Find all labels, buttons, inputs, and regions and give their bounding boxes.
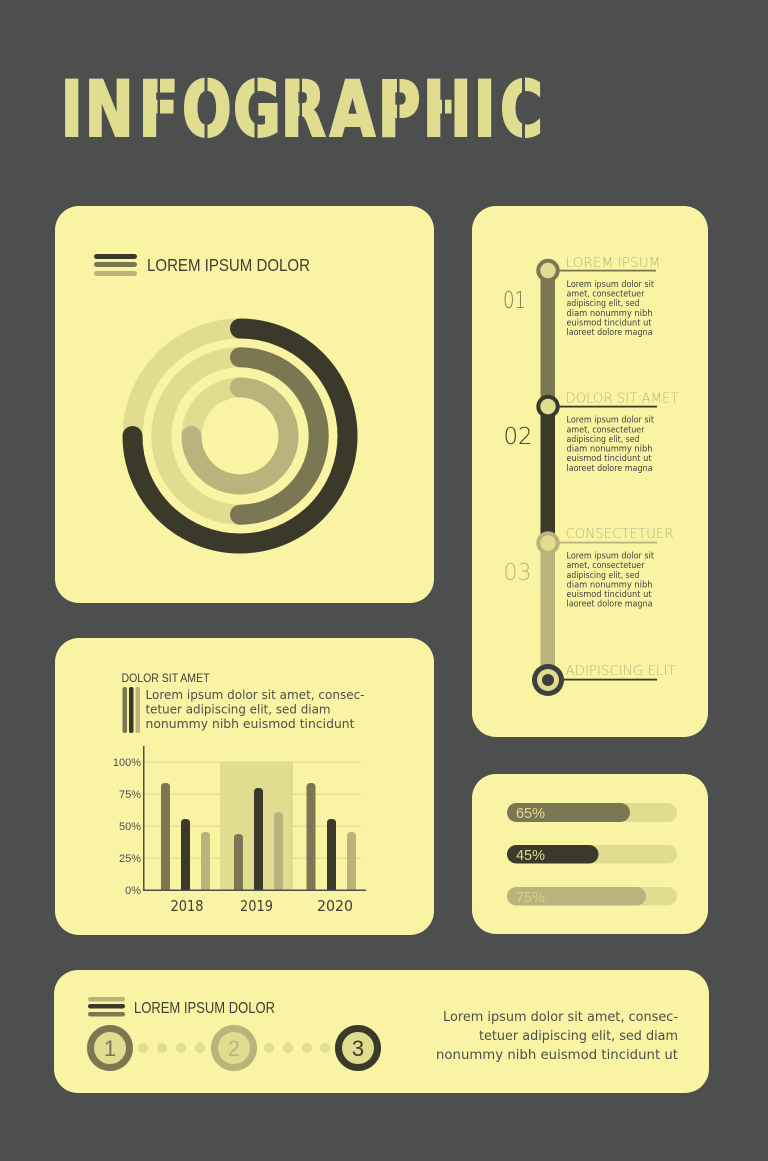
step end: ADIPISCING ELIT	[566, 663, 676, 679]
panel: timeline	[472, 206, 708, 737]
step 02: Lorem ipsum dolor sit	[566, 416, 655, 426]
progress 45%	[507, 845, 677, 864]
icon: list bars	[88, 997, 125, 1016]
step circle 1	[90, 1028, 130, 1068]
step 03: diam nonummy nibh	[566, 580, 652, 590]
chart description	[146, 687, 364, 731]
bar chart: 2019	[240, 897, 273, 915]
connector dots	[138, 1043, 330, 1053]
step 01: LOREM IPSUM	[566, 255, 660, 271]
panel: progress bars	[472, 774, 708, 934]
icon: vertical bars	[122, 687, 140, 733]
step 03: amet, consectetuer	[566, 561, 645, 571]
step 01: 01	[503, 288, 526, 314]
progress 75%	[507, 887, 677, 906]
timeline track	[540, 270, 555, 680]
chart description: nonummy nibh euismod tincidunt	[146, 716, 355, 731]
step 01	[503, 255, 660, 338]
chart description: tetuer adipiscing elit, sed diam	[146, 702, 330, 716]
step 02: laoreet dolore magna	[566, 464, 652, 474]
step 03	[504, 526, 674, 610]
step 03: Lorem ipsum dolor sit	[566, 552, 655, 562]
chart description: Lorem ipsum dolor sit amet, consec-	[146, 687, 364, 702]
progress 65%	[507, 803, 677, 822]
icon: list bars	[94, 254, 137, 276]
step circle 3	[338, 1028, 378, 1068]
steps description: nonummy nibh euismod tincidunt ut	[436, 1047, 678, 1063]
step 02: DOLOR SIT AMET	[566, 390, 679, 406]
step end	[532, 663, 676, 696]
chart heading: DOLOR SIT AMET	[122, 671, 210, 685]
bar chart: 100%	[113, 757, 141, 769]
donut rings	[132, 328, 348, 544]
panel: bar chart	[55, 638, 434, 935]
step 03: laoreet dolore magna	[566, 600, 652, 610]
bar chart: 50%	[119, 821, 141, 833]
step 01: Lorem ipsum dolor sit	[566, 280, 655, 290]
title: INFOGRAPHIC	[61, 65, 543, 154]
step 01: diam nonummy nibh	[566, 309, 652, 319]
step circle 2	[214, 1028, 254, 1068]
progress 65%: 65%	[516, 805, 545, 822]
step circle 1: 1	[104, 1036, 116, 1061]
step circle 3: 3	[352, 1036, 364, 1061]
step 02: 02	[504, 424, 532, 450]
step 03: euismod tincidunt ut	[566, 590, 652, 600]
heading: LOREM IPSUM DOLOR	[134, 1000, 275, 1017]
steps description: Lorem ipsum dolor sit amet, consec-	[443, 1009, 678, 1025]
step 03: 03	[504, 560, 532, 586]
progress 45%: 45%	[516, 847, 545, 864]
panel: steps	[54, 970, 709, 1093]
step 03: CONSECTETUER	[566, 526, 674, 542]
bar chart: 75%	[119, 789, 141, 801]
step 01: amet, consectetuer	[566, 290, 645, 300]
bar chart	[113, 746, 366, 915]
heading: LOREM IPSUM DOLOR	[147, 255, 310, 275]
bar chart: 25%	[119, 853, 141, 865]
step circle 2: 2	[228, 1036, 240, 1061]
step 02	[504, 390, 679, 474]
step 01: adipiscing elit, sed	[566, 299, 640, 309]
step 01: euismod tincidunt ut	[566, 318, 652, 328]
bar chart: 2020	[317, 897, 353, 915]
progress 75%: 75%	[516, 889, 545, 906]
bar chart: 2018	[170, 897, 204, 915]
step 02: euismod tincidunt ut	[566, 454, 652, 464]
step 02: amet, consectetuer	[566, 425, 645, 435]
step 02: adipiscing elit, sed	[566, 435, 640, 445]
step 03: adipiscing elit, sed	[566, 571, 640, 581]
steps description: tetuer adipiscing elit, sed diam	[479, 1028, 678, 1044]
steps description	[436, 1009, 678, 1063]
step 01: laoreet dolore magna	[566, 328, 652, 338]
panel: donut chart	[55, 206, 434, 603]
bar chart: 0%	[125, 885, 141, 897]
step 02: diam nonummy nibh	[566, 445, 652, 455]
